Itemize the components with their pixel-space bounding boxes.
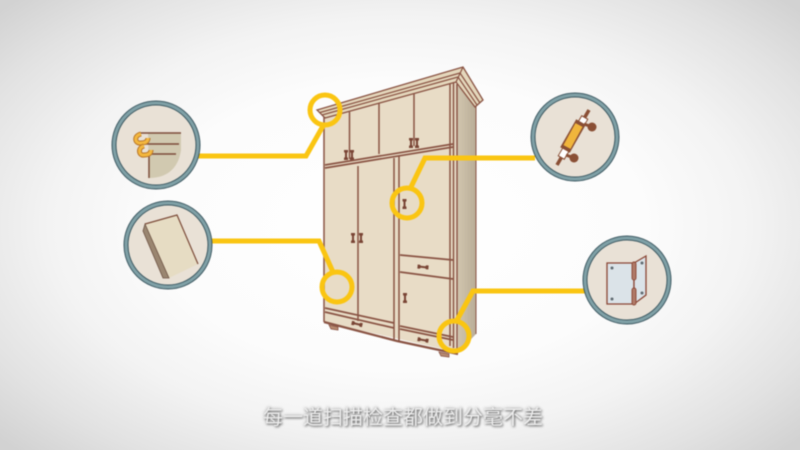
hinge icon [607, 256, 646, 305]
wardrobe side panel [456, 84, 476, 353]
callout circle: handle detail [531, 93, 619, 181]
wardrobe feet [329, 325, 449, 357]
wardrobe base edge [324, 322, 458, 354]
connector: cornice callout [198, 95, 340, 156]
connector: panel callout [212, 241, 352, 302]
door handles [344, 138, 429, 343]
subtitle: 每一道扫描检查都做到分毫不差 [263, 407, 543, 429]
handle icon [557, 110, 596, 165]
connector: hinge callout [439, 291, 585, 351]
board icon [143, 215, 198, 278]
wardrobe front [324, 80, 456, 352]
wardrobe [317, 67, 483, 357]
cornice [317, 67, 483, 118]
cornice icon [136, 133, 181, 178]
connector: handle callout [392, 158, 535, 218]
callout circle: cornice detail [112, 101, 200, 189]
callout circle: hinge detail [583, 236, 671, 324]
callout circle: panel edge detail [124, 201, 212, 289]
wardrobe trim and panel lines [324, 83, 476, 352]
